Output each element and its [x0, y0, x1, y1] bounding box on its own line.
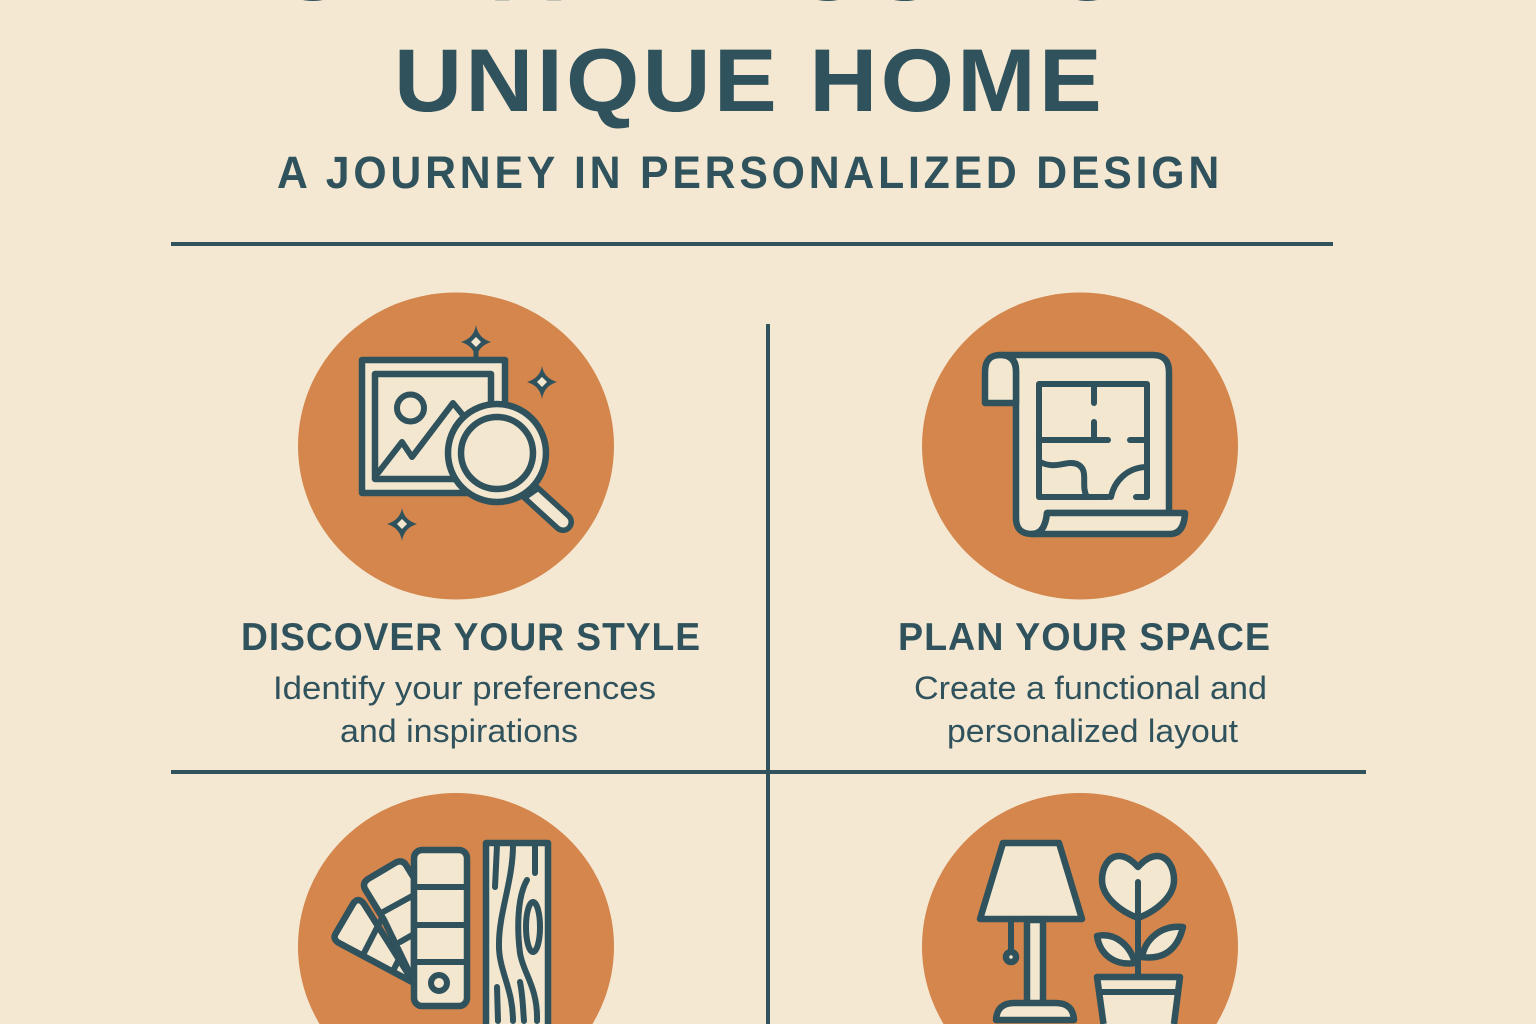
- description: [914, 670, 1267, 749]
- title: unique home: UNIQUE HOME: [394, 30, 1105, 130]
- icon: lamp and heart plant: [922, 793, 1238, 1024]
- heading: DISCOVER YOUR STYLE: [241, 616, 701, 659]
- icon: image with magnifying glass: [298, 292, 614, 600]
- subtitle: A JOURNEY IN PERSONALIZED DESIGN: [277, 147, 1223, 198]
- description: personalized layout: [947, 713, 1238, 749]
- panel: decor: [922, 793, 1238, 1024]
- description: Create a functional and: [914, 670, 1267, 706]
- heading: PLAN YOUR SPACE: [898, 616, 1271, 659]
- description: and inspirations: [340, 713, 578, 749]
- panel: discover your style: [241, 292, 701, 749]
- icon: colour swatches and wood plank: [298, 793, 614, 1024]
- panel: plan your space: [898, 292, 1271, 749]
- description: [273, 670, 656, 749]
- panel: materials: [298, 793, 614, 1024]
- description: Identify your preferences: [273, 670, 656, 706]
- icon: floor plan scroll: [922, 292, 1238, 600]
